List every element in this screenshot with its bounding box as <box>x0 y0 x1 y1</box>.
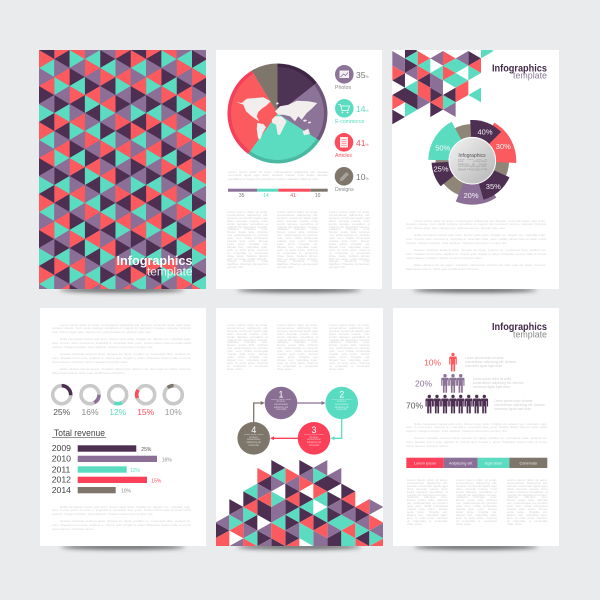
gauge labels: 15% <box>137 407 155 417</box>
stacked bar: 35 <box>239 193 245 199</box>
body text <box>406 220 546 272</box>
panel: people statistics page <box>393 308 559 546</box>
text columns <box>227 211 370 272</box>
stat row: 70%: Lorem ipsum dolor sit amet, consectetuer adipiscing elit. Aenean commodo ligula eget dolor <box>494 399 545 411</box>
tab bar: Eget dolor <box>485 461 503 465</box>
text columns: Lorem ipsum dolor sit amet, consectetuer adipiscing elit. Aenean commodo ligula eget dolor. Aenean massa. Cum sociis natoque penatibus et magnis dis parturient montes, nascetur ridiculus mus. Donec quam felis, ultricies nec, pellentesque eu, pretium quis, sem. Nulla consequat massa quis enim. Donec pede justo, fringilla vel, aliquet nec, vulputate eget, arcu. In enim justo, rhoncus ut, imperdiet a, venenatis vitae, justo. <box>407 479 448 526</box>
stat row: 70%: 70% <box>406 400 423 410</box>
gauge labels: 10% <box>165 407 182 417</box>
panel: donut chart page <box>392 44 559 289</box>
body text <box>406 422 547 450</box>
revenue bar chart: 2010 <box>52 454 71 464</box>
body text top: Aenean vulputate eleifend tellus. Aenean leo ligula, porttitor eu, consequat vitae, eleifend ac, enim. Aliquam lorem ante, dapibus in, viverra quis, feugiat a, tellus. Phasellus viverra nulla ut metus varius laoreet. Quisque rutrum. Aenean imperdiet etiam. <box>52 352 191 364</box>
tab bar: Commodo <box>520 461 537 465</box>
body text: Nulla consequat massa quis enim. Donec pede justo, fringilla vel, aliquet nec, vulputate eget, arcu. In enim justo, rhoncus ut, imperdiet a, venenatis vitae, justo. Nullam dictum felis eu pede mollis pretium. Integer tincidunt. Cras dapibus. Vivamus elementum semper nisi. <box>406 233 546 245</box>
stat: designs <box>335 167 369 193</box>
revenue bar chart: 2014 <box>52 485 71 495</box>
donut chart <box>428 120 516 205</box>
world map <box>236 97 317 140</box>
cover title <box>116 253 193 278</box>
heading: Infographics <box>492 64 547 74</box>
donut centre <box>449 137 496 184</box>
step 4: 4 <box>251 425 256 435</box>
donut centre: Infographics <box>458 153 486 159</box>
stat row: 10%: Lorem ipsum dolor sit amet, consectetuer adipiscing elit. Aenean commodo ligula eget dolor <box>465 356 516 368</box>
panel: cover page <box>39 50 206 289</box>
triangle mosaic <box>39 50 206 289</box>
stat row: 10% <box>424 353 520 371</box>
text columns: Lorem ipsum dolor sit amet, consectetuer adipiscing elit. Aenean commodo ligula eget dolor. Aenean massa. Cum sociis natoque penatibus et magnis dis parturient montes, nascetur ridiculus mus. Donec quam felis, ultricies nec, pellentesque eu, pretium quis, sem. Nulla consequat massa quis enim. Donec pede justo, fringilla vel, aliquet nec, vulputate eget, arcu. In enim justo, rhoncus ut, imperdiet a, venenatis vitae, justo. <box>456 479 497 526</box>
stat: photos <box>335 65 369 91</box>
panel: pie chart page <box>216 50 382 289</box>
body text top: Nulla consequat massa quis enim. Donec pede justo, fringilla vel, aliquet nec, vulputate eget, arcu. In enim justo, rhoncus ut, imperdiet a, venenatis vitae, justo. Nullam dictum felis eu pede mollis pretium. Integer tincidunt. Cras dapibus. Vivamus elementum semper nisi. <box>52 337 191 349</box>
gauge labels: 12% <box>109 407 127 417</box>
triangle mountain <box>215 460 383 554</box>
gauge labels: 25% <box>53 407 71 417</box>
stat: e-commerce: E-commerce <box>335 119 365 125</box>
stacked bar: 41 <box>290 193 296 199</box>
stat: articles: Articles <box>335 153 352 159</box>
revenue bar chart: 2009 <box>52 443 71 453</box>
text columns: Lorem ipsum dolor sit amet, consectetuer adipiscing elit. Aenean commodo ligula eget dolor. Aenean massa. Cum sociis natoque penatibus et magnis dis parturient montes, nascetur ridiculus mus. Donec quam felis, ultricies nec, pellentesque eu, pretium quis, sem. Nulla consequat massa quis enim. Donec pede justo, fringilla vel, aliquet nec, vulputate eget, arcu. In enim justo, rhoncus ut, imperdiet a, venenatis vitae, justo. Nullam dictum felis eu pede mollis pretium. Integer tincidunt. Cras dapibus. Vivamus elementum semper nisi. <box>329 211 370 269</box>
step 1: 1 <box>278 390 284 400</box>
stat: e-commerce: 14% <box>356 104 369 114</box>
tab bar <box>406 458 547 468</box>
donut chart: 20% <box>463 191 479 200</box>
stat: articles <box>335 133 369 159</box>
stacked bar <box>228 189 328 199</box>
stacked bar: 10 <box>315 193 321 199</box>
revenue bar chart: 15% <box>151 478 162 484</box>
revenue bar chart: 10% <box>121 488 132 494</box>
cover title: Infographics <box>116 253 192 268</box>
heading <box>492 322 547 339</box>
step 4 <box>237 422 270 455</box>
total revenue heading: Total revenue <box>54 428 105 438</box>
heading: Infographics <box>492 322 547 333</box>
donut chart: 40% <box>477 128 493 136</box>
text columns: Lorem ipsum dolor sit amet, consectetuer adipiscing elit. Aenean commodo ligula eget dolor. Aenean massa. Cum sociis natoque penatibus et magnis dis parturient montes, nascetur ridiculus mus. Donec quam felis, ultricies nec, pellentesque eu, pretium quis, sem. Nulla consequat massa quis enim. Donec pede justo, fringilla vel, aliquet nec, vulputate eget, arcu. In enim justo, rhoncus ut, imperdiet a, venenatis vitae, justo. Nullam dictum felis eu pede mollis pretium. Integer tincidunt. Cras dapibus. Vivamus elementum semper nisi. <box>227 211 268 269</box>
body text bottom: Aenean vulputate eleifend tellus. Aenean leo ligula, porttitor eu, consequat vitae, eleifend ac, enim. Aliquam lorem ante, dapibus in, viverra quis, feugiat a, tellus. Phasellus viverra nulla ut metus varius laoreet. Quisque rutrum. <box>52 519 191 531</box>
page shadows <box>60 288 538 549</box>
tab bar: Adipiscing elit <box>449 461 473 465</box>
revenue bar chart: 25% <box>141 447 152 453</box>
heading: template <box>513 70 547 80</box>
gauge labels <box>53 407 182 417</box>
stat: photos: Photos <box>335 85 352 91</box>
stat: photos: 35% <box>356 70 369 80</box>
corner triangle mosaic <box>392 44 494 124</box>
connector arrows <box>254 401 342 440</box>
revenue bar chart: 2012 <box>52 475 71 485</box>
pie chart <box>227 63 327 163</box>
donut gauges <box>53 382 186 407</box>
body text bottom <box>52 506 191 532</box>
heading <box>492 64 547 80</box>
body text: Aenean vulputate eleifend tellus. Aenean leo ligula, porttitor eu, consequat vitae, eleifend ac, enim. Aliquam lorem ante, dapibus in, viverra quis, feugiat a, tellus. Phasellus viverra nulla ut metus varius laoreet. Quisque rutrum. <box>406 436 547 448</box>
text columns <box>227 324 370 374</box>
stat: designs: Designs <box>335 187 354 193</box>
text columns: Lorem ipsum dolor sit amet, consectetuer adipiscing elit. Aenean commodo ligula eget dolor. Aenean massa. Cum sociis natoque penatibus et magnis dis parturient montes, nascetur ridiculus mus. Donec quam felis, ultricies nec, pellentesque eu, pretium quis, sem. Nulla consequat massa quis enim. Donec pede justo, fringilla vel, aliquet nec, vulputate eget, arcu. In enim justo, rhoncus ut, imperdiet a, venenatis vitae, justo. <box>507 479 548 526</box>
stacked bar: 14 <box>263 193 269 199</box>
stat: articles: 41% <box>356 138 369 148</box>
stat row: 20%: 20% <box>415 378 432 388</box>
body text: Etiam ultricies nisi vel augue. Curabitur ullamcorper ultricies nisi. Nam eget dui. Etiam rhoncus. Maecenas tempus, tellus eget condimentum rhoncus. <box>406 263 546 271</box>
donut chart: 35% <box>486 182 501 191</box>
text columns: Lorem ipsum dolor sit amet, consectetuer adipiscing elit. Aenean commodo ligula eget dolor. Aenean massa. Cum sociis natoque penatibus et magnis dis parturient montes, nascetur ridiculus mus. Donec quam felis, ultricies nec, pellentesque eu, pretium quis, sem. Nulla consequat massa quis enim. Donec pede justo, fringilla vel, aliquet nec, vulputate eget, arcu. In enim justo, rhoncus ut, imperdiet a, venenatis vitae, justo. Nullam dictum felis eu pede mollis pretium. Integer tincidunt. Cras dapibus. Vivamus elementum semper nisi. <box>277 211 318 269</box>
step 1 <box>265 387 297 419</box>
stat row: 10%: 10% <box>424 358 441 368</box>
panel: revenue page <box>40 308 206 546</box>
step 3 <box>298 422 330 455</box>
body text top <box>52 324 191 374</box>
stat row: 70% <box>406 395 549 413</box>
cover title: template <box>147 264 193 278</box>
tab bar: Lorem ipsum <box>414 461 436 465</box>
step 2: 2 <box>339 390 344 400</box>
heading: template <box>513 329 547 339</box>
donut chart: 30% <box>496 142 511 151</box>
revenue bar chart: 12% <box>130 468 141 474</box>
revenue bar chart: 2011 <box>52 464 71 474</box>
text columns: Lorem ipsum dolor sit amet, consectetuer adipiscing elit. Aenean commodo ligula eget dolor. Aenean massa. Cum sociis natoque penatibus et magnis dis parturient montes, nascetur ridiculus mus. Donec quam felis, ultricies nec, pellentesque eu, pretium quis, sem. Nulla consequat massa quis enim. Donec pede justo, fringilla vel, aliquet nec, vulputate eget, arcu. In enim justo, rhoncus ut, imperdiet a, venenatis vitae, justo. <box>227 324 268 371</box>
panel: process cycle page <box>215 308 383 554</box>
text columns <box>407 479 548 528</box>
donut chart: 50% <box>435 144 451 152</box>
stat: designs: 10% <box>356 172 369 182</box>
gauge labels: 16% <box>81 407 99 417</box>
revenue bar chart <box>52 443 172 495</box>
stat: e-commerce <box>335 99 369 125</box>
step 2 <box>325 387 358 419</box>
donut chart: 25% <box>433 164 449 174</box>
step 3: 3 <box>311 425 317 435</box>
body text: Aenean vulputate eleifend tellus. Aenean leo ligula, porttitor eu, consequat vitae, eleifend ac, enim. Aliquam lorem ante, dapibus in, viverra quis, feugiat a, tellus. Phasellus viverra nulla ut metus varius laoreet. Quisque rutrum. Aenean imperdiet etiam. <box>406 248 546 260</box>
stat row: 20% <box>415 374 528 393</box>
revenue bar chart: 16% <box>162 458 172 464</box>
stat row: 20%: Lorem ipsum dolor sit amet, consectetuer adipiscing elit. Aenean commodo ligula eget dolor <box>473 377 524 389</box>
text columns: Lorem ipsum dolor sit amet, consectetuer adipiscing elit. Aenean commodo ligula eget dolor. Aenean massa. Cum sociis natoque penatibus et magnis dis parturient montes, nascetur ridiculus mus. Donec quam felis, ultricies nec, pellentesque eu, pretium quis, sem. Nulla consequat massa quis enim. Donec pede justo, fringilla vel, aliquet nec, vulputate eget, arcu. In enim justo, rhoncus ut, imperdiet a, venenatis vitae, justo. <box>329 324 370 371</box>
text columns: Lorem ipsum dolor sit amet, consectetuer adipiscing elit. Aenean commodo ligula eget dolor. Aenean massa. Cum sociis natoque penatibus et magnis dis parturient montes, nascetur ridiculus mus. Donec quam felis, ultricies nec, pellentesque eu, pretium quis, sem. Nulla consequat massa quis enim. Donec pede justo, fringilla vel, aliquet nec, vulputate eget, arcu. In enim justo, rhoncus ut, imperdiet a, venenatis vitae, justo. <box>277 324 318 371</box>
